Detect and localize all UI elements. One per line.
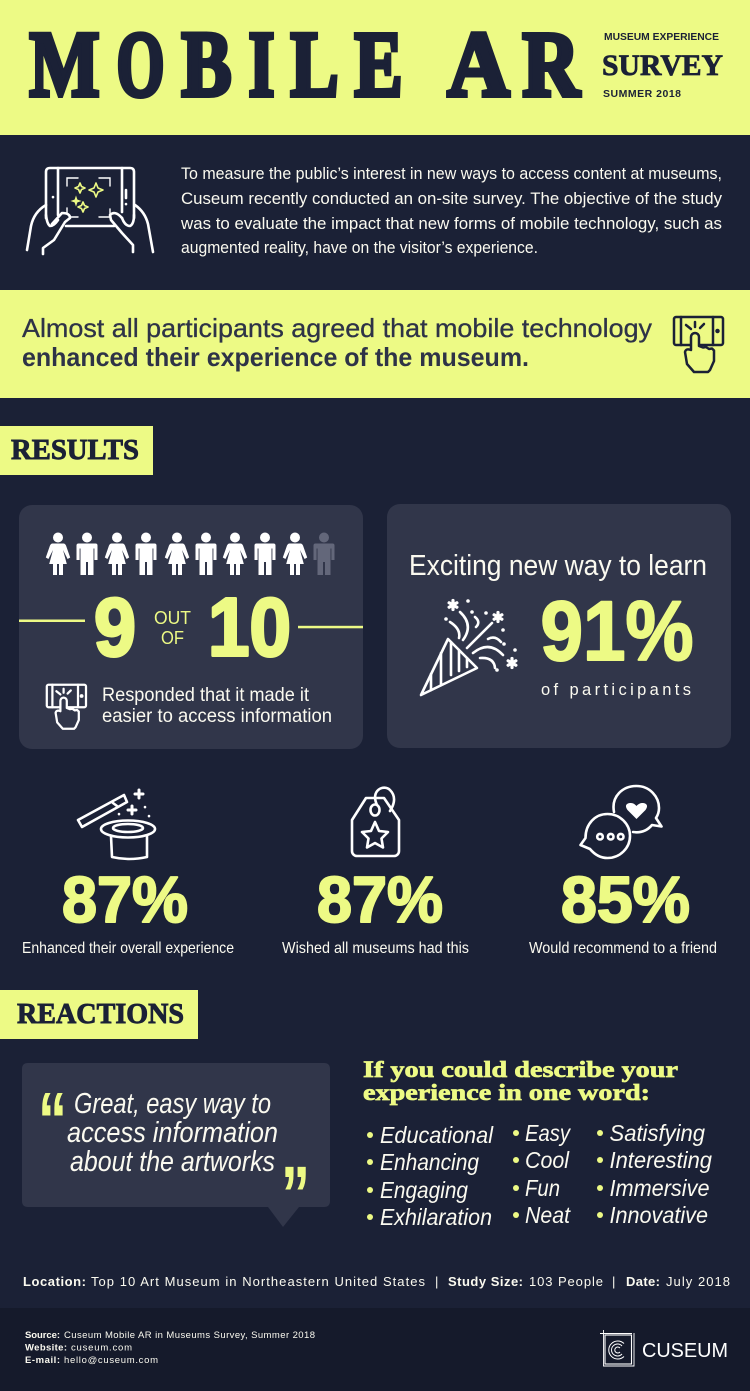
sources: Source: xyxy=(25,1330,60,1341)
study details xyxy=(23,1274,730,1289)
icon: price tag with star xyxy=(352,788,399,856)
stat: wished all museums xyxy=(282,788,469,957)
intro paragraph: augmented reality, have on the visitor’s experience. xyxy=(181,238,538,257)
section heading: results: RESULTS xyxy=(11,434,139,466)
caption: Responded that it made it xyxy=(102,684,310,706)
sources: Cuseum Mobile AR in Museums Survey, Summer 2018 xyxy=(64,1330,315,1341)
title: L xyxy=(290,14,338,116)
footer band xyxy=(0,1308,750,1391)
banner: key finding: enhanced their experience of the museum. xyxy=(22,342,529,372)
word list: Cool xyxy=(525,1147,570,1173)
icon: chat bubbles xyxy=(580,786,662,858)
stat: wished all museums: Wished all museums had this xyxy=(282,940,469,957)
study details: 103 People xyxy=(529,1274,603,1289)
statistic: 9 out of 10: OUT xyxy=(154,608,191,628)
study details: Date: xyxy=(626,1274,660,1289)
sources: cuseum.com xyxy=(71,1342,132,1354)
panel: exciting new way to learn xyxy=(387,504,731,748)
word list: Educational xyxy=(380,1122,494,1148)
section heading: results xyxy=(0,426,153,475)
banner: key finding xyxy=(0,290,750,398)
caption: of participants xyxy=(541,681,691,699)
logo: Cuseum xyxy=(600,1330,728,1366)
icon: magic hat and wand xyxy=(78,790,155,859)
quote bubble: “ xyxy=(38,1076,67,1165)
stat: would recommend: Would recommend to a friend xyxy=(529,940,717,957)
banner: key finding: Almost all participants agreed that mobile technology xyxy=(22,313,652,343)
header band xyxy=(0,0,750,135)
stat: would recommend xyxy=(529,786,717,957)
quote bubble xyxy=(22,1063,330,1239)
subtitle block: MUSEUM EXPERIENCE xyxy=(604,31,719,43)
statistic: 9 out of 10: 9 xyxy=(94,580,136,674)
stat: overall experience xyxy=(22,790,234,957)
title: O xyxy=(116,14,164,116)
sources: E-mail: xyxy=(25,1355,60,1366)
intro paragraph: To measure the public’s interest in new ways to access content at museums, xyxy=(181,164,722,183)
stat: wished all museums: 87% xyxy=(317,863,443,936)
section heading: reactions xyxy=(0,990,198,1039)
caption xyxy=(102,684,332,727)
statistic: 9 out of 10: OF xyxy=(161,628,184,648)
one word question xyxy=(363,1057,678,1105)
intro paragraph xyxy=(180,164,722,257)
caption: easier to access information xyxy=(102,705,332,727)
word list: Enhancing xyxy=(380,1149,479,1175)
quote bubble: ” xyxy=(281,1150,310,1239)
study details: July 2018 xyxy=(666,1274,730,1289)
title: I xyxy=(248,14,274,116)
study details: Top 10 Art Museum in Northeastern United States xyxy=(91,1274,425,1289)
word list: Immersive xyxy=(610,1175,710,1201)
statistic: 91%: 91% xyxy=(540,584,694,678)
stat: overall experience: Enhanced their overall experience xyxy=(22,940,234,957)
section heading: reactions: REACTIONS xyxy=(17,998,184,1030)
icon: tap on phone xyxy=(47,685,86,729)
word list: Easy xyxy=(525,1120,571,1146)
pictogram: nine of ten people xyxy=(46,532,335,575)
statistic: 9 out of 10 xyxy=(94,580,291,674)
quote bubble: access information xyxy=(67,1117,278,1149)
study details: Location: xyxy=(23,1274,86,1289)
title: A xyxy=(448,14,510,116)
word list: Interesting xyxy=(610,1147,712,1173)
word list: Fun xyxy=(525,1175,560,1201)
quote bubble: about the artworks xyxy=(70,1146,275,1178)
word list xyxy=(367,1120,712,1230)
statistic: 9 out of 10: 10 xyxy=(208,580,291,674)
panel: 9 out of 10 xyxy=(19,505,363,749)
title xyxy=(30,14,580,116)
one word question: experience in one word: xyxy=(363,1080,650,1105)
intro paragraph: Cuseum recently conducted an on-site survey. The objective of the study xyxy=(181,189,722,208)
icon: party popper xyxy=(421,600,516,695)
subtitle block xyxy=(602,31,723,100)
icon: tap on phone xyxy=(674,317,723,372)
sources xyxy=(25,1330,315,1366)
logo: Cuseum: CUSEUM xyxy=(642,1340,728,1362)
title: E xyxy=(354,14,402,116)
study details: | xyxy=(435,1274,438,1289)
quote bubble: Great, easy way to xyxy=(74,1088,271,1120)
panel: exciting new way to learn: Exciting new way to learn xyxy=(409,550,707,582)
word list: Exhilaration xyxy=(380,1204,492,1230)
title: R xyxy=(522,14,580,116)
intro paragraph: was to evaluate the impact that new forms of mobile technology, such as xyxy=(180,214,722,233)
study details: Study Size: xyxy=(448,1274,523,1289)
word list: Satisfying xyxy=(610,1120,705,1146)
study details: | xyxy=(612,1274,615,1289)
word list: Innovative xyxy=(610,1202,708,1228)
icon: hands holding tablet xyxy=(27,168,153,254)
stat: overall experience: 87% xyxy=(62,863,188,936)
title: M xyxy=(30,14,100,116)
sources: Website: xyxy=(25,1342,67,1354)
subtitle block: SURVEY xyxy=(602,49,723,82)
stat: would recommend: 85% xyxy=(561,863,690,936)
subtitle block: SUMMER 2018 xyxy=(603,88,681,100)
one word question: If you could describe your xyxy=(363,1057,678,1082)
word list: Neat xyxy=(525,1202,571,1228)
title: B xyxy=(182,14,232,116)
sources: hello@cuseum.com xyxy=(64,1355,158,1366)
word list: Engaging xyxy=(380,1177,468,1203)
